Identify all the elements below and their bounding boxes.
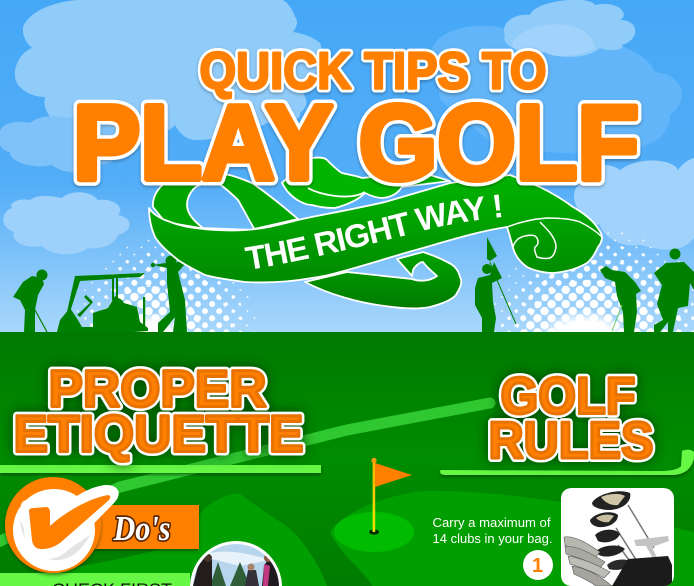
ribbon top knot fold xyxy=(308,188,365,197)
golfer swinging xyxy=(151,256,187,332)
underline left xyxy=(0,465,321,473)
heading: golf rules: RULES xyxy=(488,412,654,470)
title: QUICK TIPS TO xyxy=(200,42,546,100)
title: PLAY GOLF xyxy=(73,84,639,202)
heading: proper etiquette: PROPER xyxy=(48,360,266,418)
heading: golf rules: GOLF xyxy=(500,368,636,426)
rule 1 text: Carry a maximum of xyxy=(432,516,551,530)
do's label xyxy=(90,505,199,549)
ribbon main band xyxy=(149,175,602,282)
fairway path stroke xyxy=(0,403,490,542)
do's text: Do's xyxy=(113,509,170,548)
putting green xyxy=(334,512,414,552)
ribbon right curl xyxy=(305,252,461,308)
heading: proper etiquette: PROPER xyxy=(48,360,266,418)
heading: proper etiquette: ETIQUETTE xyxy=(14,406,304,464)
photo: golf club set xyxy=(561,488,674,586)
golfer putting xyxy=(13,270,48,332)
rule 1 text: 14 clubs in your bag. xyxy=(432,532,552,546)
rule 1 number badge: 1 xyxy=(532,555,543,577)
halftone dots right xyxy=(494,232,694,332)
ribbon top knot xyxy=(282,158,450,208)
golfer bending xyxy=(600,266,641,332)
ribbon: back pieces xyxy=(153,158,461,308)
ribbon curl detail xyxy=(507,218,602,258)
underline right: golf club xyxy=(440,450,694,475)
golfer standing xyxy=(654,248,694,332)
silhouettes: golfers and cart xyxy=(13,237,694,332)
ribbon text: THE RIGHT WAY ! xyxy=(244,194,502,269)
icon: check mark badge xyxy=(5,477,119,573)
heading: proper etiquette: ETIQUETTE xyxy=(14,406,304,464)
rule 1 number badge xyxy=(523,550,553,580)
ribbon left loop xyxy=(153,174,298,230)
heading: golf rules: RULES xyxy=(488,412,654,470)
heading: golf rules: GOLF xyxy=(500,368,636,426)
green strip with heading xyxy=(0,573,190,586)
heading: proper etiquette xyxy=(14,360,304,464)
title: QUICK TIPS TO xyxy=(200,42,546,100)
sky background xyxy=(0,0,694,332)
fairway hills xyxy=(0,491,694,586)
golfer with flag xyxy=(475,237,516,332)
clouds xyxy=(0,0,694,254)
ground xyxy=(0,332,694,586)
photo: golfers on course xyxy=(190,540,282,586)
golf cart xyxy=(57,273,148,332)
heading: golf rules xyxy=(488,368,654,470)
icon: flag on green xyxy=(369,458,412,535)
halftone dots left xyxy=(76,240,256,332)
rule 1 text xyxy=(432,516,552,546)
do's banner xyxy=(90,505,199,549)
title: PLAY GOLF xyxy=(73,84,639,202)
